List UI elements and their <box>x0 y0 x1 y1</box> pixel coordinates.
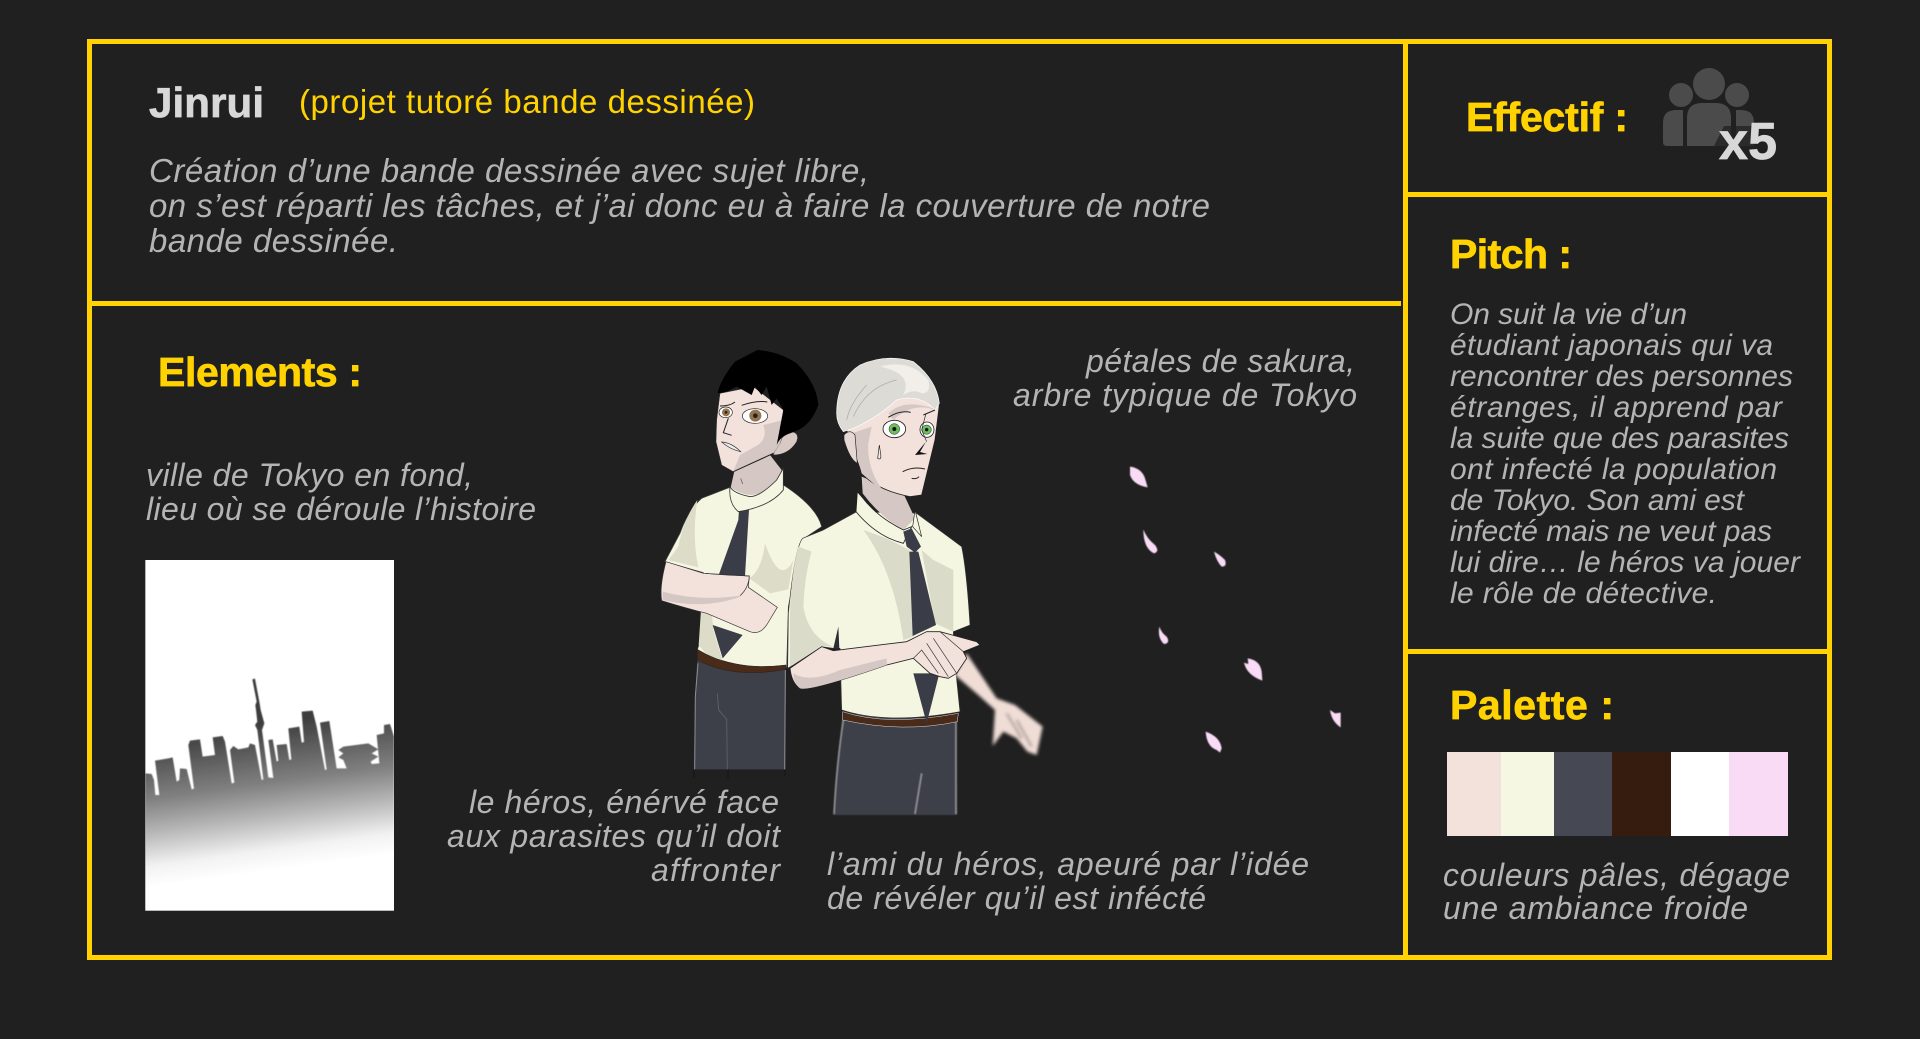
colour swatches <box>1447 752 1788 836</box>
description text: Création d’une bande dessinée avec sujet libre, <box>149 152 869 189</box>
heading: effectif: Effectif : <box>1466 94 1628 140</box>
icon: group of people x5 <box>1663 68 1777 171</box>
pitch text: ont infecté la population <box>1450 453 1777 486</box>
caption: hero: le héros, énérvé face <box>469 784 779 820</box>
panel: team size <box>1466 68 1777 171</box>
illustration: the friend <box>788 358 1043 815</box>
panel: elements <box>145 343 1357 916</box>
heading: pitch: Pitch : <box>1450 231 1572 277</box>
caption: hero: aux parasites qu’il doit <box>447 818 781 854</box>
pitch text: le rôle de détective. <box>1450 577 1717 610</box>
image: Tokyo skyline <box>145 560 394 911</box>
icon: group of people x5: x5 <box>1719 113 1777 171</box>
pitch text <box>1450 298 1801 610</box>
pitch text: étudiant japonais qui va <box>1450 329 1773 362</box>
heading: palette: Palette : <box>1450 682 1614 728</box>
title: Jinrui <box>149 79 264 126</box>
pitch text: infecté mais ne veut pas <box>1450 515 1772 548</box>
caption: petals <box>1013 343 1357 413</box>
panel: palette <box>1443 682 1790 926</box>
panel: pitch <box>1450 231 1801 610</box>
palette caption <box>1443 857 1790 926</box>
pitch text: étranges, il apprend par <box>1450 391 1783 424</box>
illustration: falling sakura petals <box>1130 467 1341 753</box>
pitch text: de Tokyo. Son ami est <box>1450 484 1746 517</box>
subtitle: (projet tutoré bande dessinée) <box>299 83 755 120</box>
panel: project title and description <box>149 79 1210 259</box>
palette caption: une ambiance froide <box>1443 890 1748 926</box>
caption: friend <box>827 846 1309 916</box>
caption: hero <box>447 784 781 888</box>
caption: city <box>146 457 536 527</box>
caption: petals: pétales de sakura, <box>1085 343 1355 379</box>
caption: friend: l’ami du héros, apeuré par l’idée <box>827 846 1309 882</box>
pitch text: la suite que des parasites <box>1450 422 1789 455</box>
caption: city: ville de Tokyo en fond, <box>146 457 473 493</box>
palette caption: couleurs pâles, dégage <box>1443 857 1790 893</box>
description text <box>149 152 1210 259</box>
pitch text: On suit la vie d’un <box>1450 298 1687 331</box>
pitch text: lui dire… le héros va jouer <box>1450 546 1801 579</box>
caption: hero: affronter <box>651 852 781 888</box>
caption: petals: arbre typique de Tokyo <box>1013 377 1357 413</box>
caption: friend: de révéler qu’il est infécté <box>827 880 1206 916</box>
illustration: the hero <box>661 350 822 778</box>
heading: elements: Elements : <box>158 349 362 395</box>
caption: city: lieu où se déroule l’histoire <box>146 491 536 527</box>
pitch text: rencontrer des personnes <box>1450 360 1793 393</box>
description text: on s’est réparti les tâches, et j’ai donc eu à faire la couverture de notre <box>149 187 1210 224</box>
description text: bande dessinée. <box>149 222 398 259</box>
